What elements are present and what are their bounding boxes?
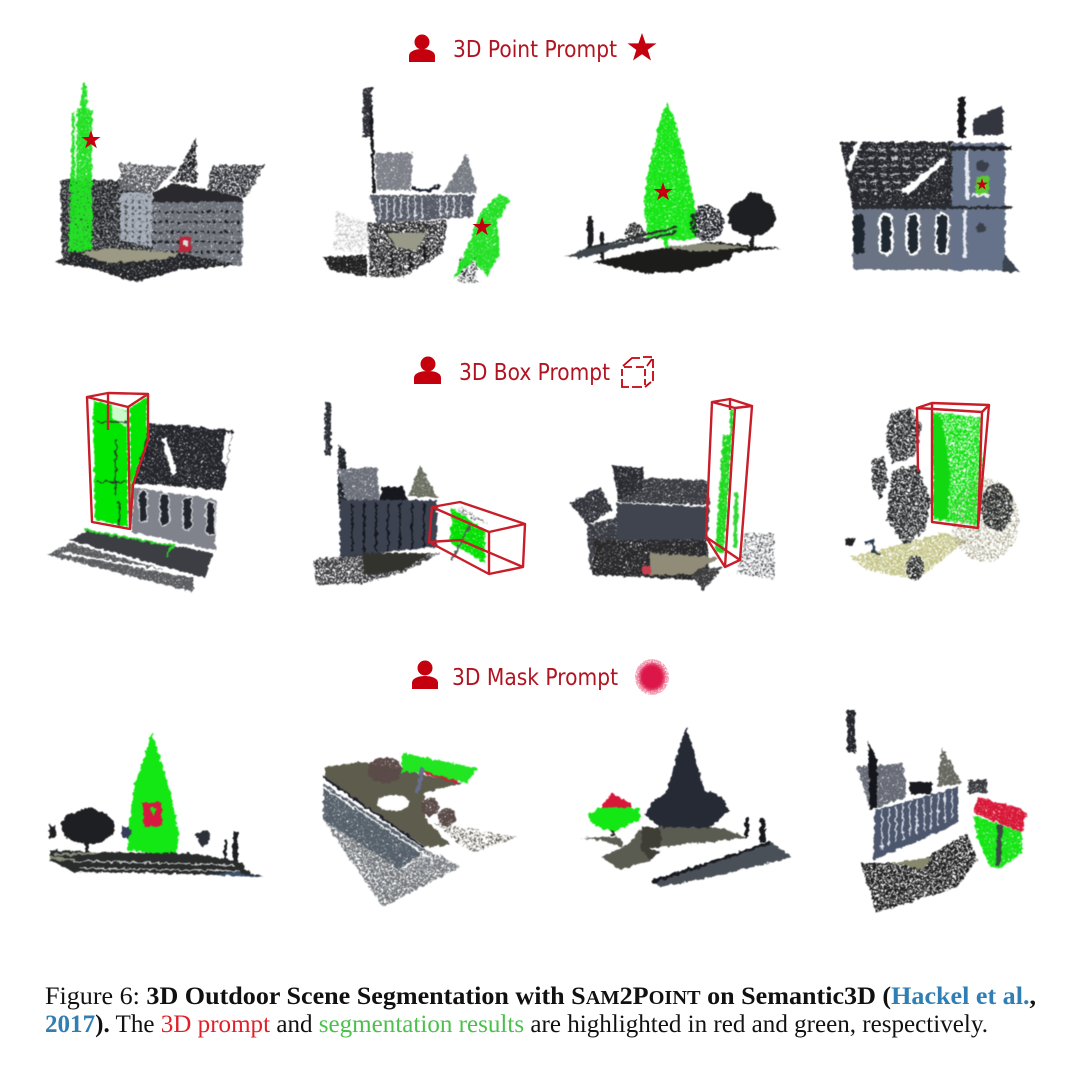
caption line 2: 2017). The 3D prompt and segmentation results are highlighted in red and green, respectively. (45, 1011, 988, 1038)
icon: user (412, 660, 438, 689)
box scene 2: church with red box on tree (313, 403, 525, 585)
prompt star (472, 217, 492, 235)
red 3D box (87, 393, 148, 529)
mask scene 3: dark fir and bush with red top (580, 728, 792, 887)
heading text: 3D Mask Prompt (452, 665, 618, 691)
box scene 4: trees and red box (845, 403, 1019, 580)
prompt star (976, 178, 988, 190)
row heading: 3D Box Prompt (414, 356, 653, 387)
row heading: 3D Mask Prompt (412, 659, 669, 695)
box scene 3: building with tall red box (570, 399, 775, 592)
figure caption (45, 983, 1036, 1038)
heading text: 3D Box Prompt (459, 360, 610, 386)
mask scene 1: green fir tree with red patch (49, 732, 263, 877)
icon: mask point cloud (635, 659, 669, 695)
red 3D box (706, 399, 752, 567)
red 3D box (429, 502, 525, 574)
prompt star (82, 130, 100, 148)
icon: star (628, 33, 656, 60)
caption line 1: Figure 6: 3D Outdoor Scene Segmentation with S AM2POINT on Semantic3D ( Hackel et al., (45, 983, 1036, 1010)
mask scene 2: road and lawn (323, 753, 517, 907)
point scene 2: aerial church with green tree (323, 88, 510, 283)
mask scene 4: aerial church with red and green tree (847, 710, 1027, 913)
icon: dashed cube (622, 357, 653, 387)
row heading: 3D Point Prompt (409, 33, 656, 63)
point scene 3: green fir tree (565, 102, 780, 273)
icon: user (414, 356, 441, 384)
point scene 4: church side view (840, 98, 1020, 272)
prompt star (654, 182, 672, 200)
heading text: 3D Point Prompt (453, 37, 617, 63)
box scene 1: church with green tower in red box (47, 393, 233, 592)
red 3D box (917, 403, 989, 528)
point scene 1: building with green tower (55, 83, 265, 282)
icon: user (409, 34, 435, 62)
